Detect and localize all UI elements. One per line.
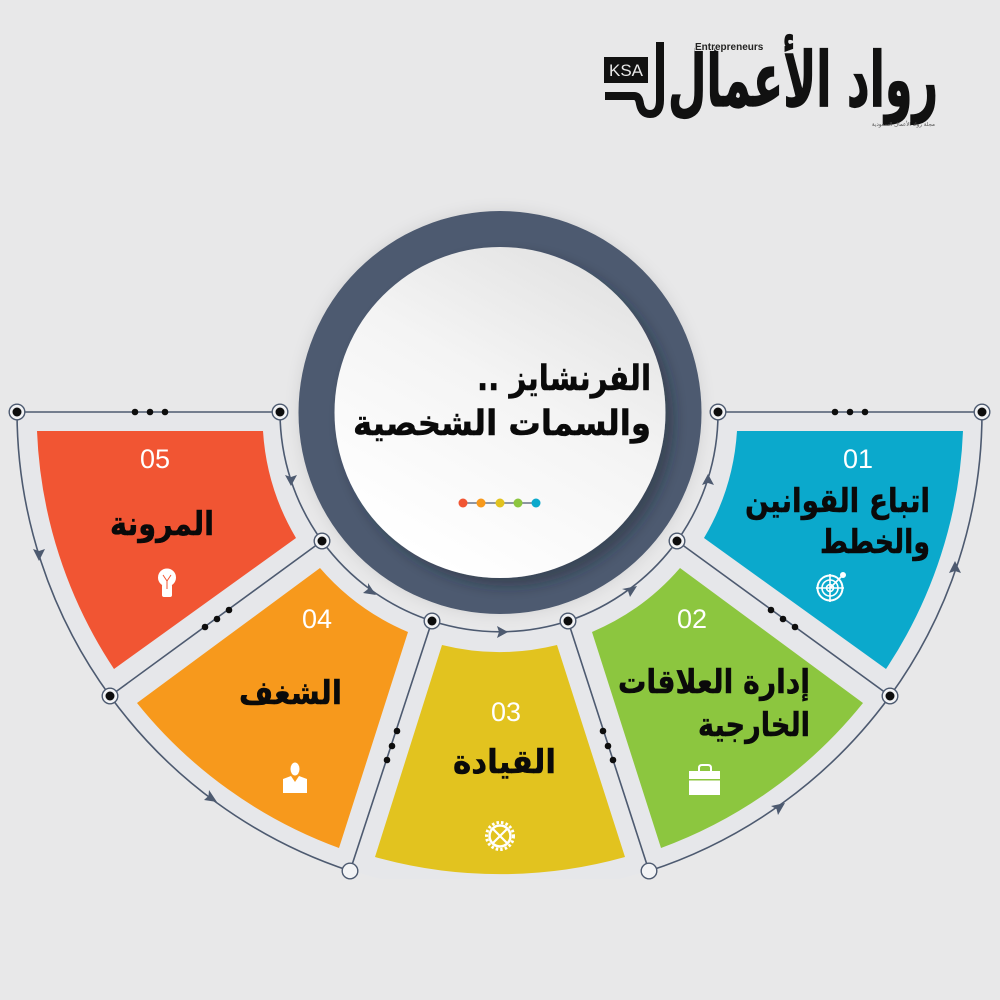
number 05: 05 <box>140 444 170 474</box>
icon: target <box>816 573 845 602</box>
logo small tagline: مجلة رواد الأعمال السعودية <box>872 120 935 128</box>
logo English tag: Entrepreneurs <box>695 42 764 53</box>
logo KSA badge: KSA <box>609 61 644 80</box>
label 02: الخارجية <box>698 705 810 744</box>
label 01: اتباع القوانين <box>745 481 930 521</box>
number 03: 03 <box>491 697 521 727</box>
label 05: المرونة <box>110 504 214 544</box>
number 01: 01 <box>843 444 873 474</box>
icon: briefcase <box>689 765 720 795</box>
icon: person <box>283 762 307 793</box>
number 04: 04 <box>302 604 332 634</box>
connector frame lines <box>17 412 982 871</box>
number 02: 02 <box>677 604 707 634</box>
label 02: إدارة العلاقات <box>618 662 810 702</box>
logo <box>604 34 938 128</box>
panel 02: green wedge <box>592 568 863 848</box>
dark ring <box>298 211 702 614</box>
logo KSA badge <box>604 57 648 83</box>
title: الفرنشايز .. <box>477 359 651 399</box>
label 03: القيادة <box>453 742 556 781</box>
panel 04: orange wedge <box>137 568 408 848</box>
white disc <box>334 247 666 578</box>
colour dots strip <box>458 498 540 508</box>
label 04: الشغف <box>239 673 342 712</box>
logo underline stroke <box>605 42 660 114</box>
panel 01: blue wedge <box>704 431 963 669</box>
node centres <box>12 408 986 700</box>
arrowheads <box>33 474 961 815</box>
panel 03: yellow wedge <box>375 645 625 874</box>
label 01 <box>745 481 930 562</box>
node markers <box>9 404 990 879</box>
icon: lightbulb <box>158 568 176 597</box>
background band <box>18 412 982 894</box>
label 02 <box>618 662 810 744</box>
connector dots <box>132 409 868 763</box>
title: والسمات الشخصية <box>353 404 651 444</box>
centre disc <box>298 211 702 614</box>
panel 05: red wedge <box>37 431 296 669</box>
label 01: والخطط <box>820 522 930 562</box>
icon: gear <box>486 822 514 850</box>
title <box>353 359 651 444</box>
